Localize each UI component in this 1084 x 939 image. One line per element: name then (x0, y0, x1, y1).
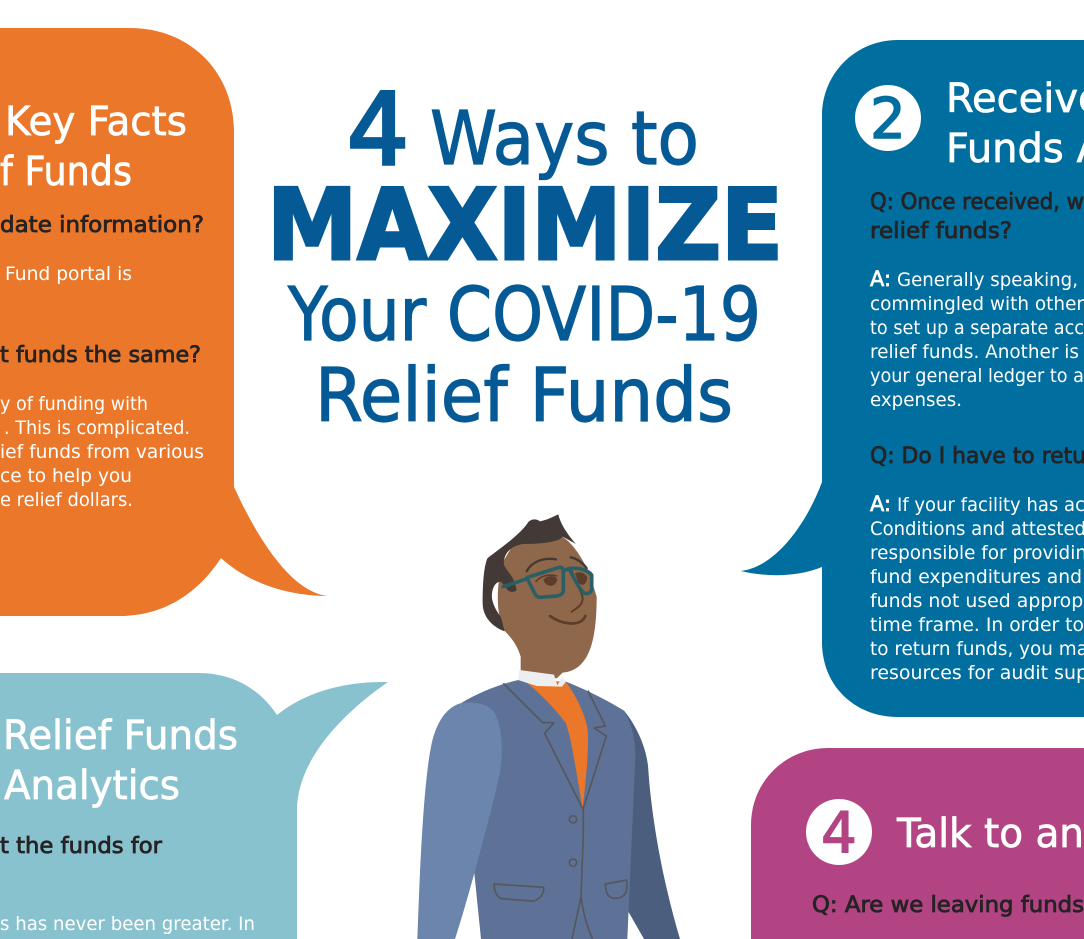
neck and face (498, 537, 597, 678)
panel: key facts about relief funds (0, 28, 328, 616)
title line: Relief Funds: Relief Funds (315, 353, 733, 439)
answer: fund portal: Fund portal is (5, 263, 132, 285)
blue speech bubble (741, 40, 1084, 717)
question: up-to-date information: date information? (0, 213, 204, 238)
title line: 4 Ways to (347, 73, 699, 188)
panel: received funds (741, 40, 1084, 717)
answer: types of funding: e relief dollars. (0, 489, 133, 511)
answer: never been greater: s has never been greater. In (0, 913, 255, 935)
number badge 4 (806, 799, 872, 866)
illustration: man in suit with glasses (417, 514, 680, 939)
question: do I have to return: Q: Do I have to retu (870, 444, 1084, 469)
heading: key facts: f Funds (0, 149, 132, 195)
heading: relief funds analytics (3, 713, 238, 809)
answer: types of funding: ief funds from various (0, 441, 204, 463)
hair (483, 514, 576, 631)
heading: receive funds (946, 76, 1084, 172)
question: leaving funds: Q: Are we leaving funds (812, 893, 1084, 918)
white collar (518, 670, 566, 687)
answer: terms and conditions: fund expenditures and (870, 566, 1082, 588)
orange shirt (526, 682, 588, 808)
answer: generally speaking: expenses. (870, 389, 962, 411)
title (267, 73, 783, 439)
answer: generally speaking: Generally speaking, (897, 269, 1078, 291)
title line: Your COVID-19: Your COVID-19 (287, 272, 761, 358)
heading: key facts: Key Facts (5, 99, 187, 145)
left sleeve (417, 703, 502, 939)
right sleeve (624, 711, 680, 939)
lapels, seams and pockets (494, 683, 627, 939)
answer: types of funding: ce to help you (0, 465, 132, 487)
number badge 2 (855, 85, 921, 152)
title line: MAXIMIZE: MAXIMIZE (267, 169, 783, 283)
purple speech bubble (751, 748, 1084, 939)
answer: terms and conditions: A: (870, 492, 891, 516)
light blue speech bubble (0, 673, 388, 939)
answer: generally speaking (870, 267, 1084, 411)
question: once received: relief funds? (870, 219, 1012, 244)
question: once received (870, 190, 1084, 244)
answer: generally speaking: A: (870, 267, 891, 291)
panel: talk to an advisor (751, 748, 1084, 939)
panel: relief funds analytics (0, 673, 388, 939)
heading: relief funds analytics: Relief Funds (3, 713, 238, 759)
jacket body (450, 680, 635, 939)
answer: terms and conditions (870, 492, 1084, 684)
answer: types of funding (0, 393, 204, 511)
heading: talk to an: Talk to an (896, 811, 1084, 857)
answer: generally speaking: commingled with other (870, 293, 1084, 315)
question: funds the same: t funds the same? (0, 343, 201, 368)
answer: terms and conditions: resources for audit sup (870, 662, 1084, 684)
question: the funds for: t the funds for (0, 834, 163, 859)
answer: terms and conditions: time frame. In order to (870, 614, 1084, 636)
answer: types of funding: y of funding with (0, 393, 148, 415)
eyes, nose and smile (527, 557, 587, 623)
answer: types of funding: . This is complicated. (4, 417, 190, 439)
orange speech bubble (0, 28, 328, 616)
title line: 4 Ways to: 4 (347, 73, 409, 188)
number badge 4: 4 (821, 801, 857, 866)
glasses (503, 567, 592, 597)
heading: key facts (0, 99, 187, 195)
heading: relief funds analytics: Analytics (4, 763, 180, 809)
number badge 2: 2 (870, 87, 906, 152)
title line: 4 Ways to: Ways to (430, 96, 699, 182)
answer: generally speaking: relief funds. Another is (870, 341, 1079, 363)
